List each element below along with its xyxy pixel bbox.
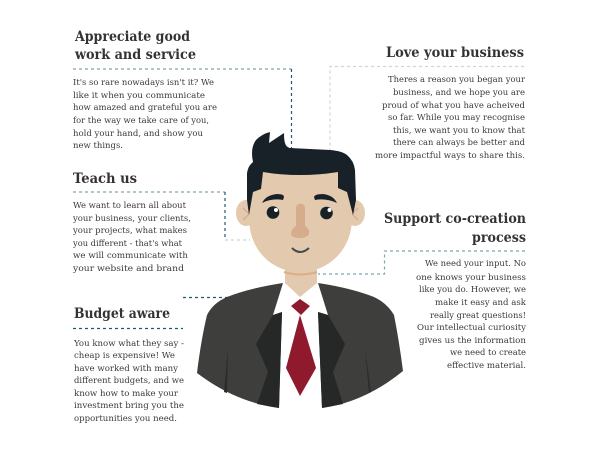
text block: teach us: We want to learn all about [73, 201, 187, 211]
text block: support co-creation: one knows your business [416, 273, 526, 283]
icon: face [249, 165, 352, 272]
heading: love your business: Love your business [386, 45, 524, 61]
text block: budget aware: cheap is expensive! We [74, 351, 175, 361]
icon: neck line [284, 272, 317, 274]
heading: teach us: Teach us [73, 171, 137, 187]
heading: appreciate good work and service: work and service [74, 47, 196, 63]
text block: support co-creation: like you do. However, we [419, 285, 526, 295]
text block: support co-creation [416, 259, 527, 371]
icon: mouth [292, 248, 309, 252]
text block: appreciate: new things. [73, 141, 123, 151]
icon: right jacket [318, 283, 403, 408]
text block: teach us: your projects, what makes [72, 226, 187, 236]
heading: appreciate good work and service [74, 29, 196, 63]
text block: love your business: there can always be better and [393, 138, 526, 148]
text block: support co-creation: We need your input. No [425, 259, 526, 269]
heading: support co-creation process: process [472, 230, 526, 246]
heading: support co-creation process: Support co-creation [384, 211, 526, 227]
text block: budget aware: You know what they say - [73, 339, 184, 349]
icon: neck [285, 262, 317, 297]
text block: appreciate: like it when you communicate [73, 91, 205, 101]
connector: budget aware [73, 298, 228, 328]
character illustration [197, 132, 403, 408]
text block: support co-creation: we need to create [450, 348, 526, 358]
icon: left lapel shadow [256, 312, 282, 408]
icon: right ear [345, 200, 365, 226]
heading: support co-creation process [384, 211, 526, 246]
text block: love your business: proud of what you have acheived [382, 101, 526, 111]
text block: appreciate [73, 78, 217, 151]
text block: budget aware [73, 339, 184, 424]
text block: budget aware: know how to make your [74, 389, 179, 399]
icon: right eye [320, 207, 333, 219]
icon: left eyebrow [262, 194, 284, 203]
text block: support co-creation: really great questions! [430, 311, 526, 321]
text block: teach us: we will communicate with [73, 251, 189, 261]
text block: support co-creation: Our intellectual curiosity [417, 323, 526, 333]
text block: support co-creation: effective material. [447, 361, 526, 371]
text block: love your business: so far. While you may recognise [388, 113, 525, 123]
icon: right lapel shadow [318, 312, 345, 408]
text block: appreciate: for the way we take care of you, [73, 116, 209, 126]
text block: budget aware: opportunities you need. [74, 414, 177, 424]
connector: teach us [73, 192, 250, 240]
icon: left ear [236, 200, 256, 226]
text block: appreciate: hold your hand, and show you [73, 129, 204, 139]
heading: budget aware: Budget aware [74, 306, 170, 322]
text block: teach us: your business, your clients, [72, 214, 191, 224]
heading: appreciate good work and service: Appreciate good [74, 29, 190, 45]
icon: hair [247, 132, 356, 215]
text block: appreciate: how amazed and grateful you are [73, 103, 217, 113]
text block: teach us: you different - that's what [72, 239, 183, 249]
text block: budget aware: have worked with many [74, 364, 178, 374]
text block: love your business: Theres a reason you began your [388, 75, 526, 85]
icon: right jacket crease [365, 348, 371, 393]
icon: nose [291, 204, 309, 238]
text block: teach us [72, 201, 191, 274]
connector: support co-creation [318, 251, 525, 274]
text block: love your business: more impactful ways to share this. [375, 151, 525, 161]
connector: appreciate [73, 69, 292, 150]
icon: left jacket crease [224, 348, 228, 393]
text block: support co-creation: make it easy and ask [435, 298, 527, 308]
text block: love your business [375, 75, 526, 161]
connector: love your business [330, 66, 524, 150]
text block: appreciate: It's so rare nowadays isn't it? We [73, 78, 214, 88]
icon: right eyebrow [314, 194, 337, 203]
text block: budget aware: investment bring you the [74, 401, 184, 411]
icon: left eye [267, 206, 279, 219]
icon: left jacket [197, 283, 283, 408]
text block: support co-creation: gives us the information [419, 336, 527, 346]
text block: budget aware: different budgets, and we [74, 376, 184, 386]
text block: teach us: your website and brand [72, 264, 185, 274]
text block: love your business: business, and we hope you are [393, 88, 525, 98]
text block: love your business: this, we want you to know that [393, 126, 526, 136]
icon: tie [286, 299, 316, 396]
